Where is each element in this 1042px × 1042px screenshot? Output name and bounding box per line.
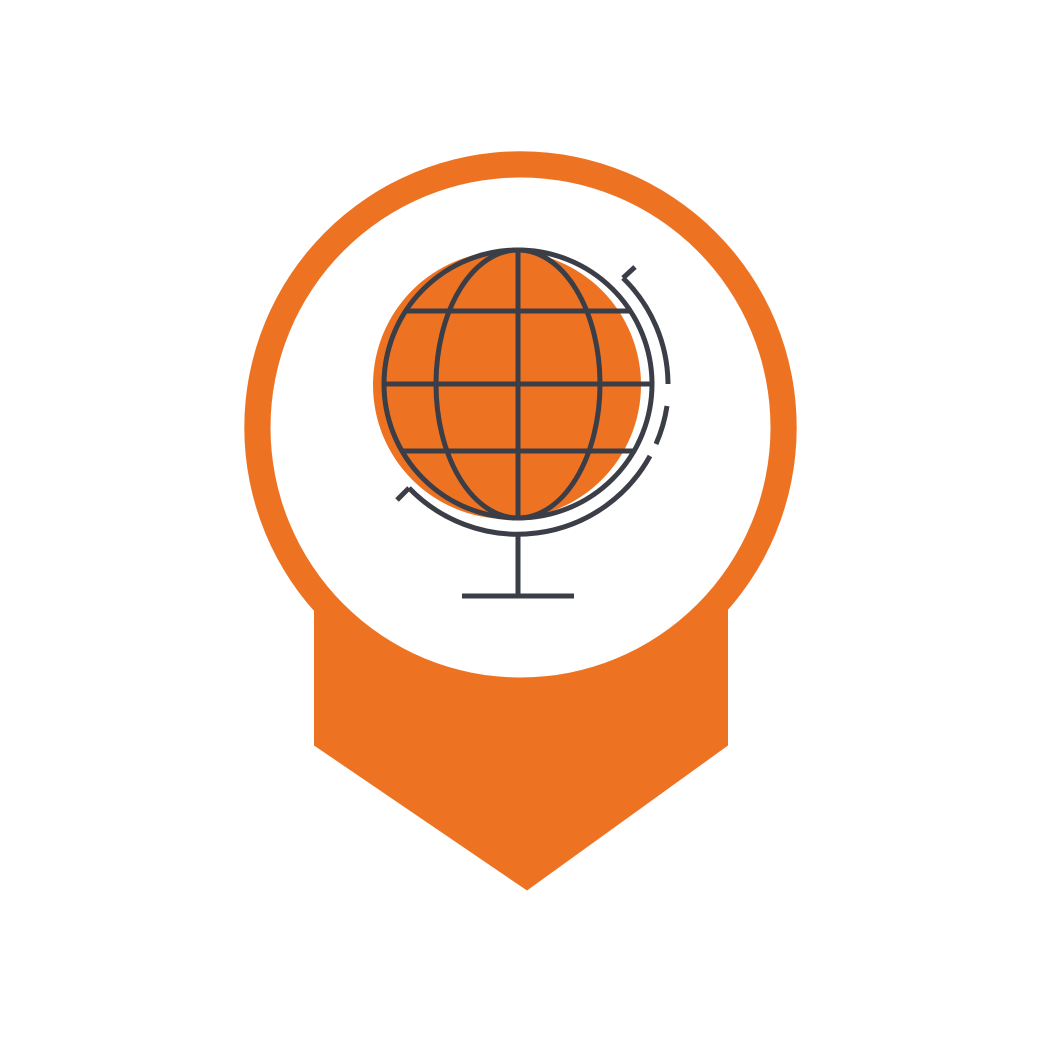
stand arc upper xyxy=(623,267,668,384)
icon: desk globe xyxy=(373,250,668,596)
globe outline xyxy=(384,250,652,518)
pin inner circle xyxy=(270,178,770,678)
pin ring xyxy=(244,151,797,704)
stand arc lower xyxy=(397,456,650,534)
pin badge xyxy=(244,151,797,890)
globe grid lines xyxy=(385,250,651,518)
globe meridian ellipses xyxy=(436,250,600,518)
stand post and base xyxy=(462,536,574,596)
stand arc segment xyxy=(656,406,667,444)
pin tail xyxy=(314,560,728,890)
globe orange fill xyxy=(373,251,641,519)
